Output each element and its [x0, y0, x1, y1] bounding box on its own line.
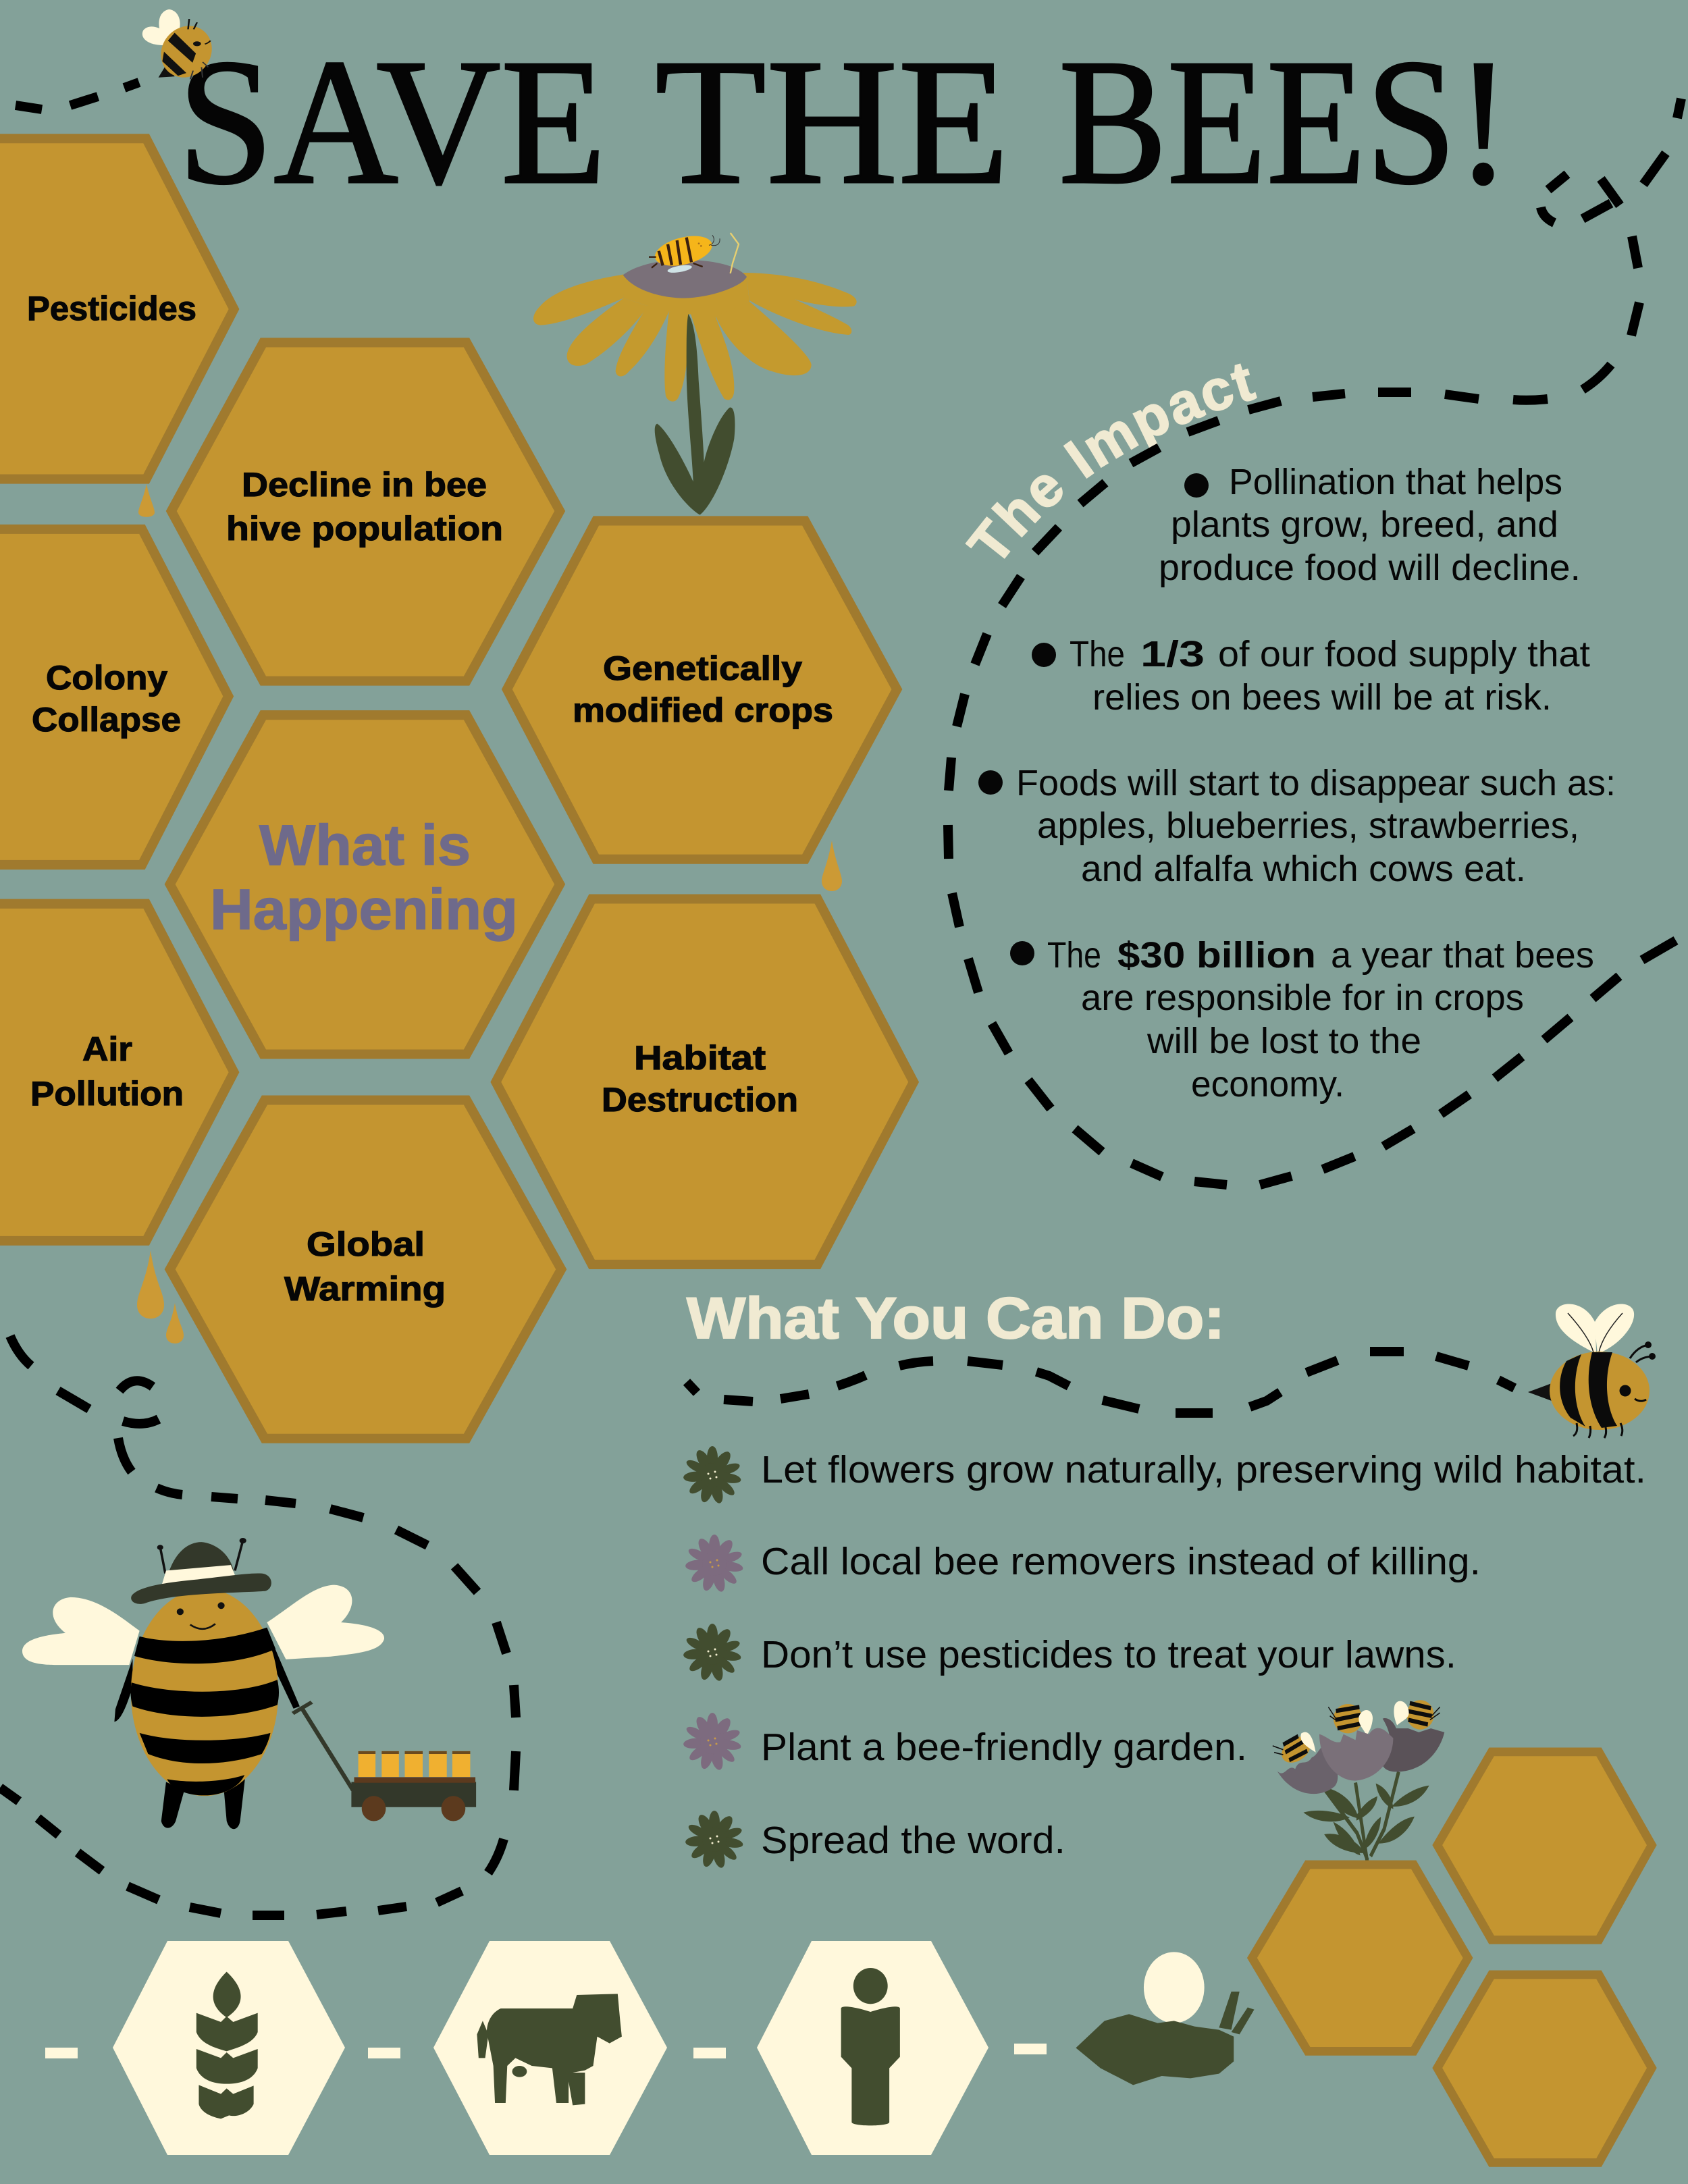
label: genetically modified crops: modified crops: [573, 691, 833, 729]
icon: flying bee at top: [142, 9, 216, 79]
heading: what is happening: What is: [259, 814, 471, 877]
hexagon: upper right: [1438, 1752, 1652, 1940]
impact item: pollination: Pollination that helps: [1229, 462, 1562, 502]
label: air pollution: Pollution: [30, 1075, 184, 1113]
label: habitat destruction: [602, 1039, 798, 1119]
label: air pollution: Air: [82, 1030, 132, 1068]
label: colony collapse: Colony: [46, 659, 167, 697]
flight trail: bottom left loop: [0, 1336, 516, 1915]
label: pesticides: Pesticides: [27, 290, 196, 327]
impact item: economy: will be lost to the: [1146, 1021, 1421, 1061]
icon: green flower: [683, 1446, 742, 1505]
impact item: foods disappear: apples, blueberries, strawberries,: [1037, 805, 1579, 846]
heading: what is happening: Happening: [210, 878, 518, 941]
impact item: economy: $30 billion: [1117, 935, 1316, 976]
impact item: economy: economy.: [1191, 1064, 1344, 1104]
action: plant a garden: Plant a bee-friendly garden.: [761, 1726, 1247, 1769]
label: habitat destruction: Habitat: [634, 1039, 766, 1077]
stems: [1325, 1772, 1398, 1864]
hexagon: habitat destruction: [496, 899, 914, 1264]
action: let flowers grow: [683, 1446, 1646, 1505]
impact item: pollination: plants grow, breed, and: [1171, 504, 1558, 545]
label: global warming: Global: [307, 1225, 425, 1263]
impact item: food supply: 1/3: [1140, 634, 1205, 674]
icon: green flower: [683, 1624, 742, 1682]
title: THE: [655, 22, 1009, 221]
impact item: foods disappear: Foods will start to disappear such as:: [1016, 763, 1616, 803]
bee on left flower: [1273, 1732, 1316, 1767]
action list: [683, 1446, 1646, 1869]
flower disk: [623, 260, 747, 298]
label: decline in bee hive population: hive population: [226, 510, 503, 548]
icon: purple flower: [683, 1713, 742, 1772]
label: air pollution: [30, 1030, 184, 1113]
hexagon: person: [757, 1941, 988, 2155]
action: no pesticides: [683, 1624, 1456, 1682]
action: call bee removers: Call local bee removers instead of killing.: [761, 1540, 1481, 1583]
label: genetically modified crops: Genetically: [603, 649, 802, 687]
connector dash 1: [45, 2048, 78, 2058]
hexagon: what is happening: [170, 715, 560, 1054]
hexagon: air pollution: [0, 904, 234, 1241]
impact item: economy: The: [1047, 935, 1101, 976]
label: colony collapse: [32, 659, 181, 739]
illustration: bee with hat pulling honey wagon: [22, 1538, 476, 1829]
heading: what is happening: [210, 814, 518, 941]
icon: green flower: [685, 1811, 744, 1869]
antennae: [160, 1541, 243, 1574]
drip near pesticides: [138, 484, 155, 517]
petals: [533, 273, 857, 402]
food chain row: [45, 1941, 1255, 2155]
label: decline in bee hive population: [226, 466, 503, 548]
label: genetically modified crops: [573, 649, 833, 729]
action: let flowers grow: Let flowers grow naturally, preserving wild habitat.: [761, 1448, 1646, 1491]
flight trail: top left: [16, 82, 139, 109]
impact bullet list: [978, 462, 1616, 1104]
title: BEES!: [1059, 22, 1510, 221]
action: call bee removers: [685, 1535, 1481, 1593]
icon: cow: [477, 1994, 622, 2105]
label: global warming: Warming: [284, 1270, 446, 1308]
hexagon: flower base: [1252, 1865, 1468, 2051]
impact item: food supply: [1032, 634, 1590, 718]
leaves: [1305, 1784, 1428, 1855]
heading: the impact (curved): The Impact: [966, 363, 1257, 559]
stem and leaves: [655, 314, 735, 515]
bee on middle flower: [1328, 1704, 1373, 1735]
legs and arms: [114, 1634, 300, 1829]
illustration: flower with sleeping bee: [533, 231, 857, 515]
honey drips: [137, 484, 842, 1343]
wagon: [351, 1782, 476, 1807]
hexagon: pesticides: [0, 138, 234, 479]
label: global warming: [284, 1225, 446, 1308]
connector dash 4: [1014, 2044, 1047, 2054]
body: [131, 1589, 278, 1796]
icon: bee at end of trail: [1528, 1304, 1656, 1438]
honey jars: [359, 1751, 470, 1777]
hexagon: global warming: [170, 1100, 561, 1439]
empty honeycomb cluster: [1252, 1752, 1652, 2162]
action: spread the word: Spread the word.: [761, 1819, 1065, 1862]
face: [177, 1602, 225, 1615]
hexagon: wheat: [113, 1941, 345, 2155]
connector dash 3: [693, 2048, 726, 2058]
impact item: food supply: The: [1070, 634, 1125, 674]
impact item: foods disappear: and alfalfa which cows eat.: [1081, 849, 1526, 889]
impact item: economy: [1010, 935, 1594, 1104]
honeycomb: causes: [0, 138, 914, 1439]
impact item: pollination: [1159, 462, 1581, 588]
title: [178, 22, 1510, 221]
hat: [169, 1542, 234, 1576]
impact item: economy: are responsible for in crops: [1081, 978, 1524, 1018]
label: decline in bee hive population: Decline in bee: [242, 466, 487, 504]
action: no pesticides: Don’t use pesticides to treat your lawns.: [761, 1633, 1456, 1676]
impact item: food supply: of our food supply that: [1218, 634, 1590, 674]
label: habitat destruction: Destruction: [602, 1081, 798, 1119]
hexagon: genetically modified crops: [507, 521, 897, 859]
flight trail: impact loop: [948, 99, 1681, 1185]
hexagon: colony collapse: [0, 529, 228, 865]
label: colony collapse: Collapse: [32, 701, 181, 739]
sleeping bee: [649, 231, 739, 274]
drip near genetically modified crops: [822, 841, 842, 891]
large drip: [137, 1250, 164, 1319]
hexagon labels: [27, 290, 833, 1308]
connector dash 2: [368, 2048, 400, 2058]
icon: bee silhouette: [1076, 1952, 1255, 2085]
stripes: [131, 1628, 279, 1795]
wagon handle: [293, 1702, 353, 1790]
hexagon: decline in bee hive population: [172, 342, 560, 681]
hexagon: lower right: [1438, 1975, 1652, 2162]
heading: what you can do: What You Can Do:: [687, 1286, 1225, 1351]
flower: middle: [1319, 1728, 1393, 1781]
action: plant a garden: [683, 1713, 1247, 1772]
wings: [22, 1585, 384, 1665]
bee on right flower: [1394, 1700, 1440, 1730]
impact item: foods disappear: [978, 763, 1616, 889]
title: SAVE: [178, 22, 606, 221]
illustration: purple flowers with bees: [1273, 1700, 1444, 1864]
icon: person: [841, 1968, 900, 2125]
icon: purple flower: [685, 1535, 744, 1593]
icon: wheat: [196, 1972, 258, 2119]
flower: right: [1383, 1718, 1444, 1772]
impact item: pollination: produce food will decline.: [1159, 548, 1581, 588]
action: spread the word: [685, 1811, 1065, 1869]
hexagon: cow: [433, 1941, 667, 2155]
flight trail: what you can do: [687, 1352, 1514, 1413]
small drip: [166, 1303, 184, 1343]
impact item: food supply: relies on bees will be at risk.: [1092, 677, 1552, 718]
impact item: economy: a year that bees: [1331, 935, 1594, 976]
flower: left: [1277, 1746, 1338, 1794]
